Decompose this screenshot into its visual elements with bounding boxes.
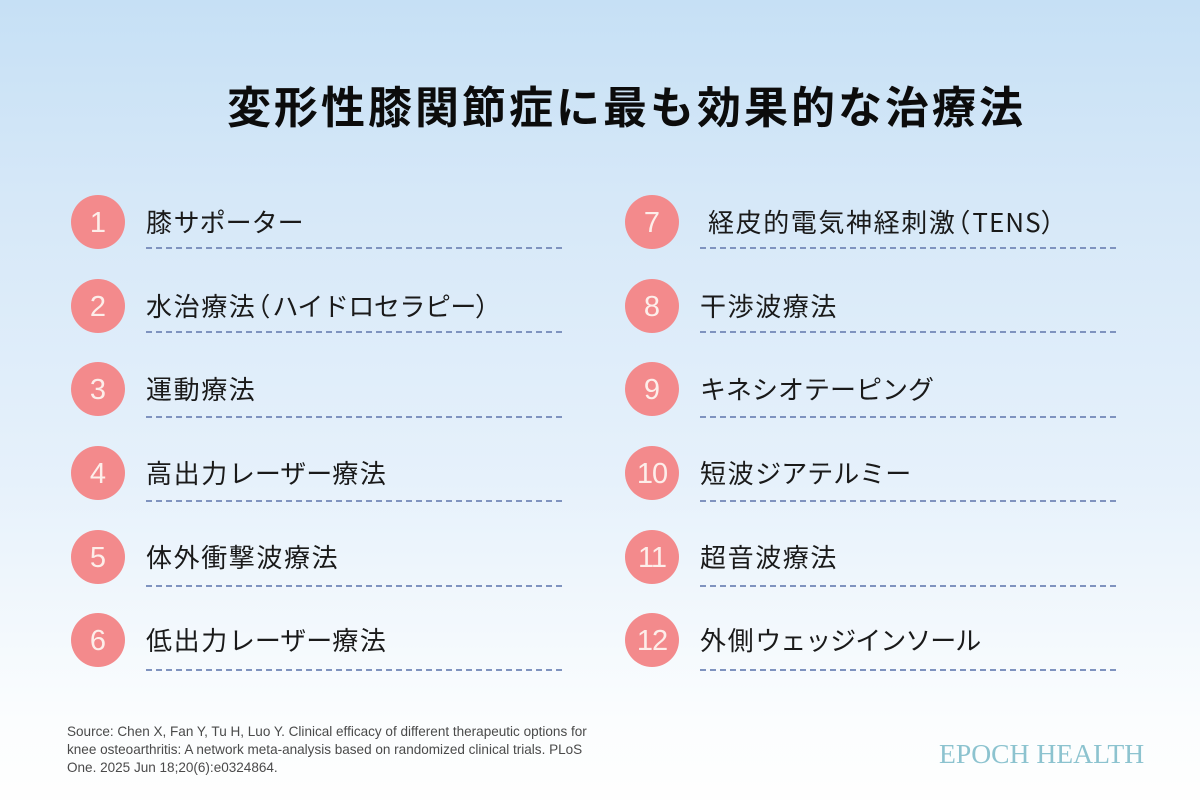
- source citation: knee osteoarthritis: A network meta-analysis based on randomized clinical trials. PLoS: [67, 742, 582, 757]
- list item 5: 体外衝撃波療法: [146, 538, 339, 575]
- list item 11: 11: [638, 542, 666, 574]
- list item 6: [71, 613, 562, 671]
- list item 8: 干渉波療法: [700, 287, 838, 324]
- list item 11: 超音波療法: [700, 538, 838, 575]
- list item 12: [625, 613, 1116, 671]
- list item 2: [71, 279, 562, 333]
- list item 2: 水治療法（ハイドロセラピー）: [146, 287, 492, 324]
- logo: Epoch Health: EPOCH HEALTH: [939, 738, 1144, 769]
- list item 5: 5: [90, 542, 106, 574]
- list item 11: [625, 530, 1116, 587]
- list item 6: 低出力レーザー療法: [146, 621, 388, 658]
- list item 4: 高出力レーザー療法: [146, 454, 388, 491]
- list item 10: 短波ジアテルミー: [700, 454, 911, 491]
- list item 7: [625, 195, 1116, 249]
- source citation: Source: Chen X, Fan Y, Tu H, Luo Y. Clinical efficacy of different therapeutic options for: [67, 724, 587, 739]
- source citation: [67, 724, 587, 775]
- list item 1: 1: [90, 207, 106, 239]
- list item 7: 経皮的電気神経刺激（TENS）: [708, 203, 1058, 240]
- list item 3: 3: [90, 374, 106, 406]
- list item 9: [625, 362, 1116, 418]
- list item 8: 8: [644, 291, 660, 323]
- list item 8: [625, 279, 1116, 333]
- list item 4: 4: [90, 458, 106, 490]
- list item 4: [71, 446, 562, 502]
- list item 9: キネシオテーピング: [700, 370, 934, 407]
- list item 10: [625, 446, 1116, 502]
- list item 10: 10: [637, 458, 667, 490]
- list item 3: 運動療法: [146, 370, 256, 407]
- list item 7: 7: [644, 207, 660, 239]
- list item 3: [71, 362, 562, 418]
- list item 6: 6: [90, 625, 106, 657]
- source citation: One. 2025 Jun 18;20(6):e0324864.: [67, 760, 278, 775]
- list item 1: [71, 195, 562, 249]
- list item 9: 9: [644, 374, 660, 406]
- list item 12: 外側ウェッジインソール: [700, 621, 980, 658]
- title: 変形性膝関節症に最も効果的な治療法: [227, 72, 1026, 136]
- list item 2: 2: [90, 291, 106, 323]
- list item 5: [71, 530, 562, 587]
- list item 12: 12: [637, 625, 667, 657]
- list item 1: 膝サポーター: [146, 203, 304, 240]
